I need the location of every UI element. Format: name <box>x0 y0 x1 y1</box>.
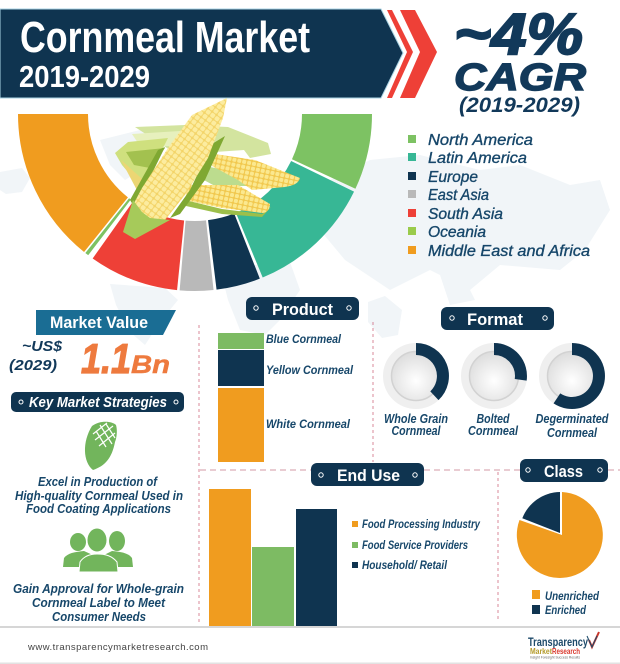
pie chart: class <box>517 492 603 578</box>
base husk <box>123 200 170 239</box>
market value banner <box>36 310 176 335</box>
stacked bar: product: Blue Cornmeal <box>266 332 342 346</box>
heading: product: Product <box>272 300 333 319</box>
main cob kernels <box>133 98 227 222</box>
legend: class <box>532 589 600 617</box>
donut: degerminated <box>536 343 609 440</box>
icon: red chevrons <box>387 10 437 98</box>
donut: degerminated: Cornmeal <box>547 426 597 440</box>
text: strategy one <box>15 475 183 516</box>
semicircle regional chart <box>53 114 337 256</box>
market value banner: Market Value <box>50 313 148 332</box>
world map background <box>0 130 610 345</box>
title: Cornmeal Market <box>20 13 310 62</box>
heading: key market strategies: Key Market Strategies <box>29 394 167 411</box>
donut: bolted <box>461 343 527 438</box>
legend: regions: Middle East and Africa <box>428 243 590 260</box>
text: strategy one: High-quality Cornmeal Used in <box>15 489 183 503</box>
legend: regions: Europe <box>428 169 478 186</box>
donut: bolted: Bolted <box>476 412 510 426</box>
main cob leaves <box>130 147 165 208</box>
stacked bar: product: Yellow Cornmeal <box>266 363 354 377</box>
legend: end use <box>352 519 480 572</box>
market value figure: Bn <box>131 351 170 379</box>
donut: whole grain <box>383 343 449 438</box>
legend: regions: South Asia <box>428 206 503 223</box>
icon: corn cobs <box>115 98 300 239</box>
donut: whole grain: Cornmeal <box>392 424 441 438</box>
heading: class: Class <box>544 462 583 481</box>
text: strategy two: Gain Approval for Whole-grain <box>13 582 184 596</box>
CAGR callout: (2019-2029) <box>459 94 580 117</box>
left husk <box>115 138 168 184</box>
legend: regions: Oceania <box>428 224 486 241</box>
market value figure: ~US$ <box>22 338 63 355</box>
back husk <box>135 125 271 158</box>
upper right cob <box>200 166 256 186</box>
legend: end use: Food Service Providers <box>362 540 468 552</box>
subtitle years: 2019-2029 <box>19 59 150 94</box>
market value figure: (2029) <box>9 357 57 374</box>
logo <box>528 632 599 660</box>
heading: end use <box>311 463 424 486</box>
text: strategy two: Cornmeal Label to Meet <box>32 596 166 610</box>
heading: class <box>520 459 608 482</box>
text: strategy one: Food Coating Applications <box>26 502 171 516</box>
donut: degerminated: Degerminated <box>536 412 609 426</box>
logo: Transparency <box>528 635 588 649</box>
footer website: www.transparencymarketresearch.com <box>27 642 208 653</box>
stacked bar: product <box>218 332 354 462</box>
text: strategy two <box>13 582 184 624</box>
text: strategy one: Excel in Production of <box>38 475 159 489</box>
text: strategy two: Consumer Needs <box>52 610 146 624</box>
logo: Research <box>552 647 580 656</box>
CAGR callout: ~4% <box>454 2 583 67</box>
legend: regions: East Asia <box>428 187 489 204</box>
legend: end use: Food Processing Industry <box>362 519 480 531</box>
icon: people <box>63 528 133 572</box>
legend: class: Enriched <box>545 603 587 617</box>
legend: class: Unenriched <box>545 589 600 603</box>
legend: end use: Household/ Retail <box>362 560 448 572</box>
heading: format: Format <box>467 310 523 329</box>
CAGR callout <box>454 2 587 117</box>
logo: Market <box>530 647 552 656</box>
heading: product <box>246 297 359 320</box>
logo: Insight Foresight Success Results <box>530 656 580 660</box>
heading: format <box>441 307 554 330</box>
donut: bolted: Cornmeal <box>468 424 518 438</box>
lower right cob <box>185 200 271 217</box>
legend: regions <box>408 132 590 260</box>
icon: corn <box>85 422 117 470</box>
market value figure <box>9 335 170 382</box>
title banner <box>0 9 403 98</box>
stacked bar: product: White Cornmeal <box>266 417 351 431</box>
donut: whole grain: Whole Grain <box>384 412 448 426</box>
heading: end use: End Use <box>337 466 400 485</box>
bar chart: end use <box>209 489 337 627</box>
legend: regions: Latin America <box>428 150 527 167</box>
market value figure: 1.1 <box>81 335 131 382</box>
legend: regions: North America <box>428 132 533 149</box>
CAGR callout: CAGR <box>454 57 587 99</box>
